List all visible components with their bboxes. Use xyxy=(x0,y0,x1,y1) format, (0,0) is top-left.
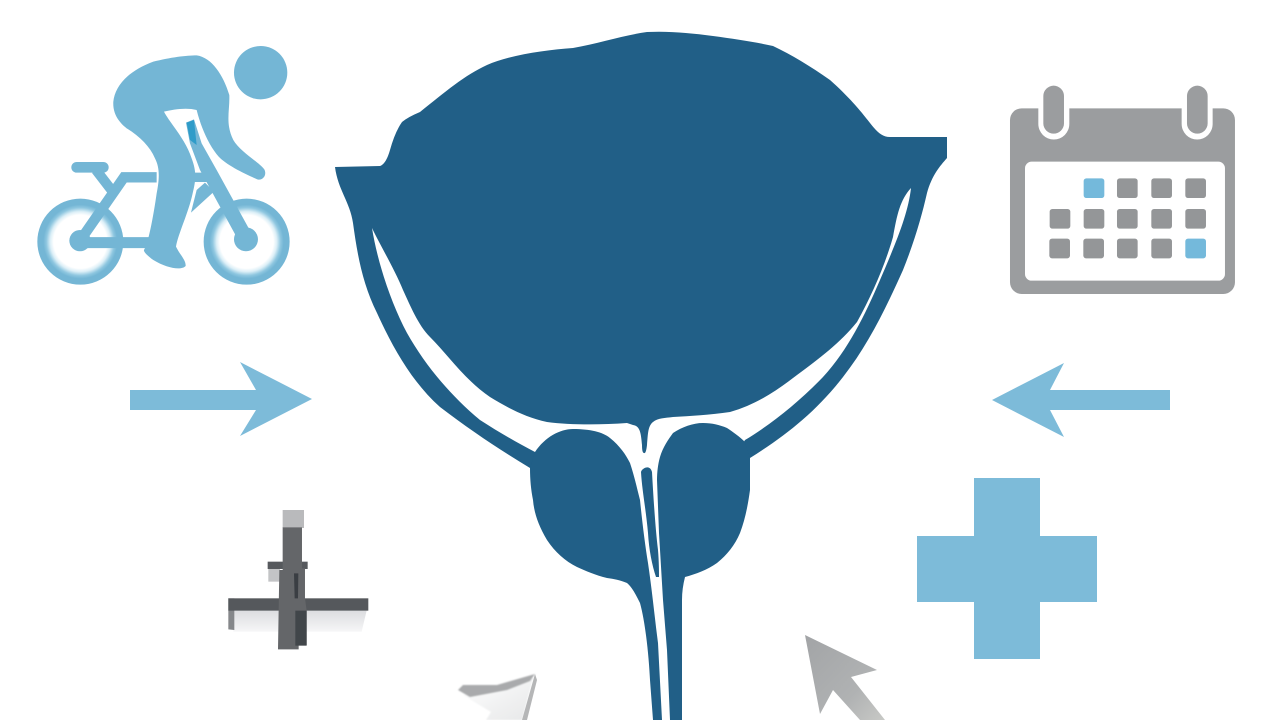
vertical bar xyxy=(278,527,307,649)
front wheel xyxy=(204,199,290,285)
horizontal bar xyxy=(228,598,368,611)
icon: light blue medical cross xyxy=(917,478,1097,659)
small side bar xyxy=(268,562,308,569)
cross shadow xyxy=(233,611,367,632)
rider inner shading xyxy=(187,120,197,145)
icon: bladder and prostate anatomy xyxy=(335,32,947,720)
arrow: grey arrow, lower right xyxy=(805,635,885,720)
rear wheel xyxy=(37,199,123,285)
central urethra sliver xyxy=(641,467,659,577)
pale arrow right edge xyxy=(522,674,537,720)
left prostate lobe and urethra wall xyxy=(530,429,662,720)
rider body xyxy=(113,55,265,268)
arrow: pointing left xyxy=(992,363,1170,437)
calendar page xyxy=(1025,162,1225,281)
icon: calendar xyxy=(1010,86,1235,294)
bladder and outer wall xyxy=(335,32,947,468)
arrow: pointing right xyxy=(130,362,312,436)
right binding ring xyxy=(1182,86,1213,139)
top pale tip xyxy=(283,510,304,528)
arrow: pale grey arrow, lower centre xyxy=(458,674,537,720)
icon: cyclist on bicycle xyxy=(37,46,290,285)
bicycle frame xyxy=(77,167,217,243)
left binding ring xyxy=(1038,86,1069,139)
pale arrow fill xyxy=(463,678,533,720)
icon: dark grey cross xyxy=(228,510,368,649)
pale arrow upper edge xyxy=(458,674,535,697)
rider head xyxy=(234,46,287,99)
right prostate lobe and urethra wall xyxy=(657,423,750,720)
bicycle fork xyxy=(186,119,253,243)
calendar body xyxy=(1010,108,1235,294)
calendar day squares xyxy=(1049,178,1206,258)
white gap around bladder xyxy=(372,188,911,480)
